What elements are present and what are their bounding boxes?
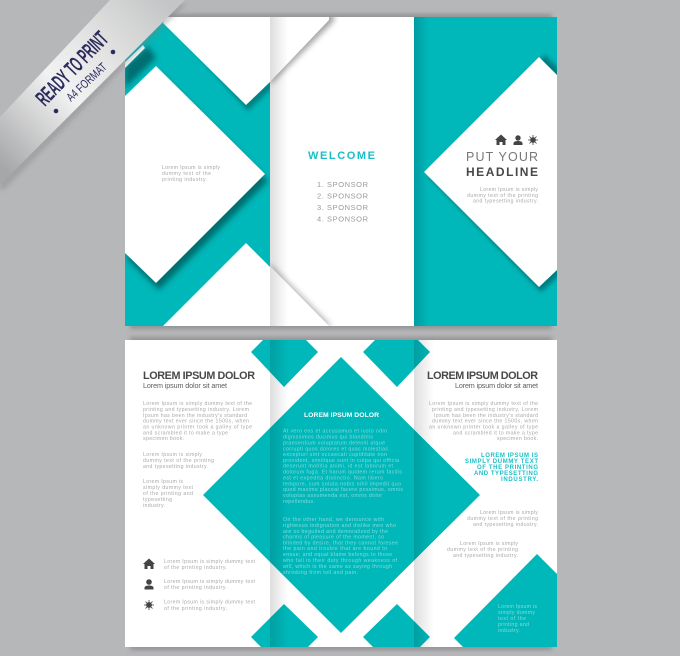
panel: left cover with white diamonds bbox=[125, 17, 272, 326]
headline: HEADLINE bbox=[466, 165, 538, 179]
text block: centre paragraph 2: shrinking from toil and pain. bbox=[283, 570, 358, 576]
text block: centre paragraph 1: At vero eos et accusamus et iusto odio bbox=[283, 429, 387, 435]
text block: centre paragraph 1: corrupti quos dolores et quas molestias bbox=[283, 446, 388, 452]
text block: centre paragraph 1: est et expedita distinctio. Nam libero bbox=[283, 475, 383, 481]
text block: left paragraph 3: typesetting bbox=[143, 497, 172, 503]
feature text 2: Lorem Ipsum is simply dummy text bbox=[164, 579, 256, 585]
text block: left paragraph 3: simply dummy text bbox=[143, 485, 194, 491]
callout: teal statement: OF THE PRINTING bbox=[477, 465, 538, 471]
text block: headline description bbox=[467, 187, 538, 204]
text block: left paragraph 1: and scrambled it to make a type bbox=[143, 430, 228, 436]
icon: person bbox=[144, 579, 154, 590]
sponsor list bbox=[317, 180, 369, 224]
text block: left paragraph 1: printing and typesetting industry. Lorem bbox=[143, 407, 249, 413]
text block: right paragraph 1: Ipsum has been the industry's standard bbox=[434, 413, 538, 419]
sponsor list: 4. SPONSOR bbox=[317, 214, 369, 224]
icon: home bbox=[495, 134, 507, 145]
callout: teal statement: LOREM IPSUM IS bbox=[481, 453, 538, 459]
text block: left cover: Lorem Ipsum is simply bbox=[162, 165, 220, 171]
large centre diamond bbox=[203, 357, 480, 633]
feature text 3: Lorem Ipsum is simply dummy text bbox=[164, 600, 256, 606]
text block: left paragraph 1 bbox=[143, 401, 252, 442]
top white shape bbox=[163, 17, 270, 105]
text block: left paragraph 2: and typesetting industry. bbox=[143, 464, 208, 470]
ribbon subtitle: A4 FORMAT bbox=[63, 60, 110, 104]
bottom flap shadow bbox=[270, 263, 332, 330]
callout: teal statement: SIMPLY DUMMY TEXT bbox=[465, 459, 538, 465]
text block: left paragraph 1: specimen book. bbox=[143, 436, 184, 442]
ribbon subtitle bbox=[54, 50, 115, 113]
feature text 1: of the printing industry. bbox=[164, 565, 227, 571]
main white diamond bbox=[125, 66, 265, 283]
text block: headline description: dummy text of the printing bbox=[467, 193, 538, 199]
text block: left paragraph 3: Lorem Ipsum is bbox=[143, 479, 183, 485]
text block: centre paragraph 2: charms of pleasure of the moment, so bbox=[283, 534, 384, 540]
ribbon: ready to print bbox=[0, 0, 187, 190]
icon: sun bbox=[528, 135, 538, 145]
text block: left paragraph 1: Lorem Ipsum is simply dummy text of the bbox=[143, 401, 252, 407]
text block: corner shape: simply dummy bbox=[498, 610, 535, 616]
small diamond top right bbox=[363, 340, 430, 387]
feature text 2 bbox=[164, 579, 256, 591]
text block: centre paragraph 2: ensue; and equal blame belongs to those bbox=[283, 552, 392, 558]
left column heading: Lorem ipsum dolor sit amet bbox=[143, 381, 227, 390]
icon: person bbox=[514, 135, 522, 145]
text block: headline description: and typesetting industry. bbox=[473, 198, 538, 204]
text block: centre paragraph 1: praesentium voluptatum deleniti atque bbox=[283, 440, 385, 446]
text block: left paragraph 1: Ipsum has been the industry's standard bbox=[143, 413, 247, 419]
text block: left paragraph 3: industry. bbox=[143, 503, 165, 509]
brochure drop shadow bbox=[130, 337, 552, 650]
text block: right paragraph 1: Lorem Ipsum is simply dummy text of the bbox=[429, 401, 538, 407]
panel: centre welcome bbox=[270, 14, 414, 330]
text block: left cover: printing industry. bbox=[162, 177, 207, 183]
text block: corner shape: industry. bbox=[498, 628, 520, 634]
top flap bbox=[270, 17, 329, 82]
left column heading: LOREM IPSUM DOLOR bbox=[143, 370, 255, 382]
fold shading bbox=[270, 340, 434, 647]
text block: left paragraph 3: of the printing and bbox=[143, 491, 193, 497]
panel: top brochure (outer side) bbox=[125, 14, 560, 330]
text block: centre paragraph 1: tempore, cum soluta nobis nihil impedit quo bbox=[283, 481, 401, 487]
panel: bottom brochure (inner side) bbox=[125, 337, 557, 650]
text block: centre paragraph 2: the pain and trouble that are bound to bbox=[283, 546, 387, 552]
sponsor list: 1. SPONSOR bbox=[317, 180, 369, 189]
text block: right paragraph 3 bbox=[447, 541, 518, 559]
text block: centre paragraph 1: dignissimos ducimus qui blanditiis bbox=[283, 435, 373, 441]
text block: centre paragraph 1: dolorum fuga. Et harum quidem rerum facilis bbox=[283, 470, 402, 476]
feature text 3 bbox=[164, 600, 256, 612]
text block: centre paragraph 2: blinded by desire, that they cannot foresee bbox=[283, 540, 398, 546]
text block: right paragraph 1 bbox=[429, 401, 538, 442]
callout: teal statement bbox=[465, 453, 538, 483]
text block: corner shape bbox=[498, 604, 537, 634]
text block: left paragraph 1: dummy text ever since the 1500s, when bbox=[143, 418, 249, 424]
centre heading: LOREM IPSUM DOLOR bbox=[304, 412, 379, 419]
text block: right paragraph 1: and scrambled it to make a type bbox=[453, 430, 538, 436]
text block: centre paragraph 1: deserunt mollitia animi, id est laborum et bbox=[283, 464, 394, 470]
text block: centre paragraph 1: voluptas assumenda est, omnis dolor bbox=[283, 493, 382, 499]
text block: centre paragraph 2: are so beguiled and demoralized by the bbox=[283, 529, 388, 535]
text block: left cover bbox=[162, 165, 220, 183]
heading: welcome: WELCOME bbox=[308, 150, 375, 162]
panel: right cover bbox=[414, 17, 560, 326]
text block: right paragraph 3: Lorem Ipsum is simply bbox=[460, 541, 518, 547]
text block: left paragraph 2 bbox=[143, 452, 214, 470]
icon: home bbox=[143, 558, 155, 569]
right column heading: LOREM IPSUM DOLOR bbox=[427, 370, 538, 382]
corner shape bottom right bbox=[454, 554, 557, 647]
feature text 1 bbox=[164, 559, 256, 571]
text block: corner shape: text of the bbox=[498, 616, 526, 622]
bottom flap bbox=[270, 266, 329, 326]
text block: right paragraph 1: specimen book. bbox=[497, 436, 538, 442]
sponsor list: 2. SPONSOR bbox=[317, 192, 369, 200]
icon: sun bbox=[144, 600, 154, 610]
text block: right paragraph 2: and typesetting industry. bbox=[473, 522, 538, 528]
text block: centre paragraph 2: On the other hand, we denounce with bbox=[283, 517, 384, 523]
text block: right paragraph 2: dummy text of the printing bbox=[467, 516, 538, 522]
left column heading bbox=[143, 370, 255, 390]
text block: corner shape: Lorem Ipsum is bbox=[498, 604, 537, 610]
text block: centre paragraph 1: excepturi sint occaecati cupiditate non bbox=[283, 452, 387, 458]
right column heading: Lorem ipsum dolor sit amet bbox=[455, 381, 538, 390]
feature text 1: Lorem Ipsum is simply dummy text bbox=[164, 559, 256, 565]
text block: left paragraph 3 bbox=[143, 479, 194, 509]
shadows of the white shapes bbox=[125, 44, 270, 292]
text block: right paragraph 3: and typesetting industry. bbox=[453, 553, 518, 559]
text block: right paragraph 1: printing and typesetting industry. Lorem bbox=[432, 407, 538, 413]
sponsor list: 3. SPONSOR bbox=[317, 203, 369, 212]
text block: centre paragraph 1 bbox=[283, 429, 403, 505]
bottom white shape bbox=[163, 243, 270, 326]
brochure drop shadow bbox=[130, 14, 552, 329]
text block: left paragraph 2: Lorem Ipsum is simply bbox=[143, 452, 202, 458]
callout: teal statement: INDUSTRY. bbox=[501, 477, 538, 483]
text block: centre paragraph 2: who fail in their duty through weakness of bbox=[283, 558, 398, 564]
text block: right paragraph 2 bbox=[467, 510, 538, 528]
small diamond bottom right bbox=[363, 604, 430, 647]
text block: centre paragraph 2 bbox=[283, 517, 398, 576]
text block: left paragraph 2: dummy text of the printing bbox=[143, 458, 214, 464]
headline: PUT YOUR bbox=[466, 150, 538, 164]
text block: headline description: Lorem Ipsum is simply bbox=[480, 187, 538, 193]
small diamond top left bbox=[251, 340, 318, 387]
text block: centre paragraph 1: repellendus. bbox=[283, 499, 315, 505]
right column heading bbox=[427, 370, 538, 390]
white sliver under ribbon bbox=[125, 45, 145, 68]
callout: teal statement: AND TYPESETTING bbox=[474, 471, 538, 477]
text block: centre paragraph 2: righteous indignation and dislike men who bbox=[283, 523, 396, 529]
top flap shadow bbox=[270, 14, 334, 85]
teal diamonds bbox=[203, 340, 557, 647]
text block: right paragraph 1: dummy text ever since the 1500s, when bbox=[432, 418, 538, 424]
text block: right paragraph 1: an unknown printer took a galley of type bbox=[429, 424, 538, 430]
text block: right paragraph 3: dummy text of the printing bbox=[447, 547, 518, 553]
headline bbox=[466, 150, 538, 179]
text block: centre paragraph 1: quod maxime placeat facere possimus, omnis bbox=[283, 487, 403, 493]
white diamond bbox=[424, 57, 557, 287]
text block: left paragraph 1: an unknown printer took a galley of type bbox=[143, 424, 252, 430]
feature text 2: of the printing industry. bbox=[164, 585, 227, 591]
text block: centre paragraph 2: will, which is the same as saying through bbox=[283, 564, 392, 570]
feature text 3: of the printing industry. bbox=[164, 606, 227, 612]
text block: centre paragraph 1: provident, similique sunt in culpa qui officia bbox=[283, 458, 399, 464]
text block: right paragraph 2: Lorem Ipsum is simply bbox=[480, 510, 538, 516]
small diamond bottom left bbox=[251, 604, 318, 647]
text block: left cover: dummy text of the bbox=[162, 171, 211, 177]
text block: corner shape: printing and bbox=[498, 622, 529, 628]
